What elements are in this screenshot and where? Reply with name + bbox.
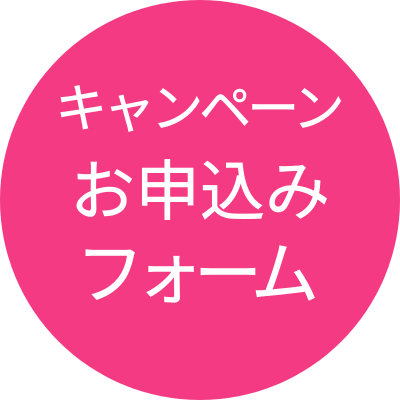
line 2: application: お申込み	[70, 155, 330, 228]
line 3: form: フォーム	[76, 237, 310, 313]
line 1: campaign: キャンペーン	[55, 81, 341, 139]
